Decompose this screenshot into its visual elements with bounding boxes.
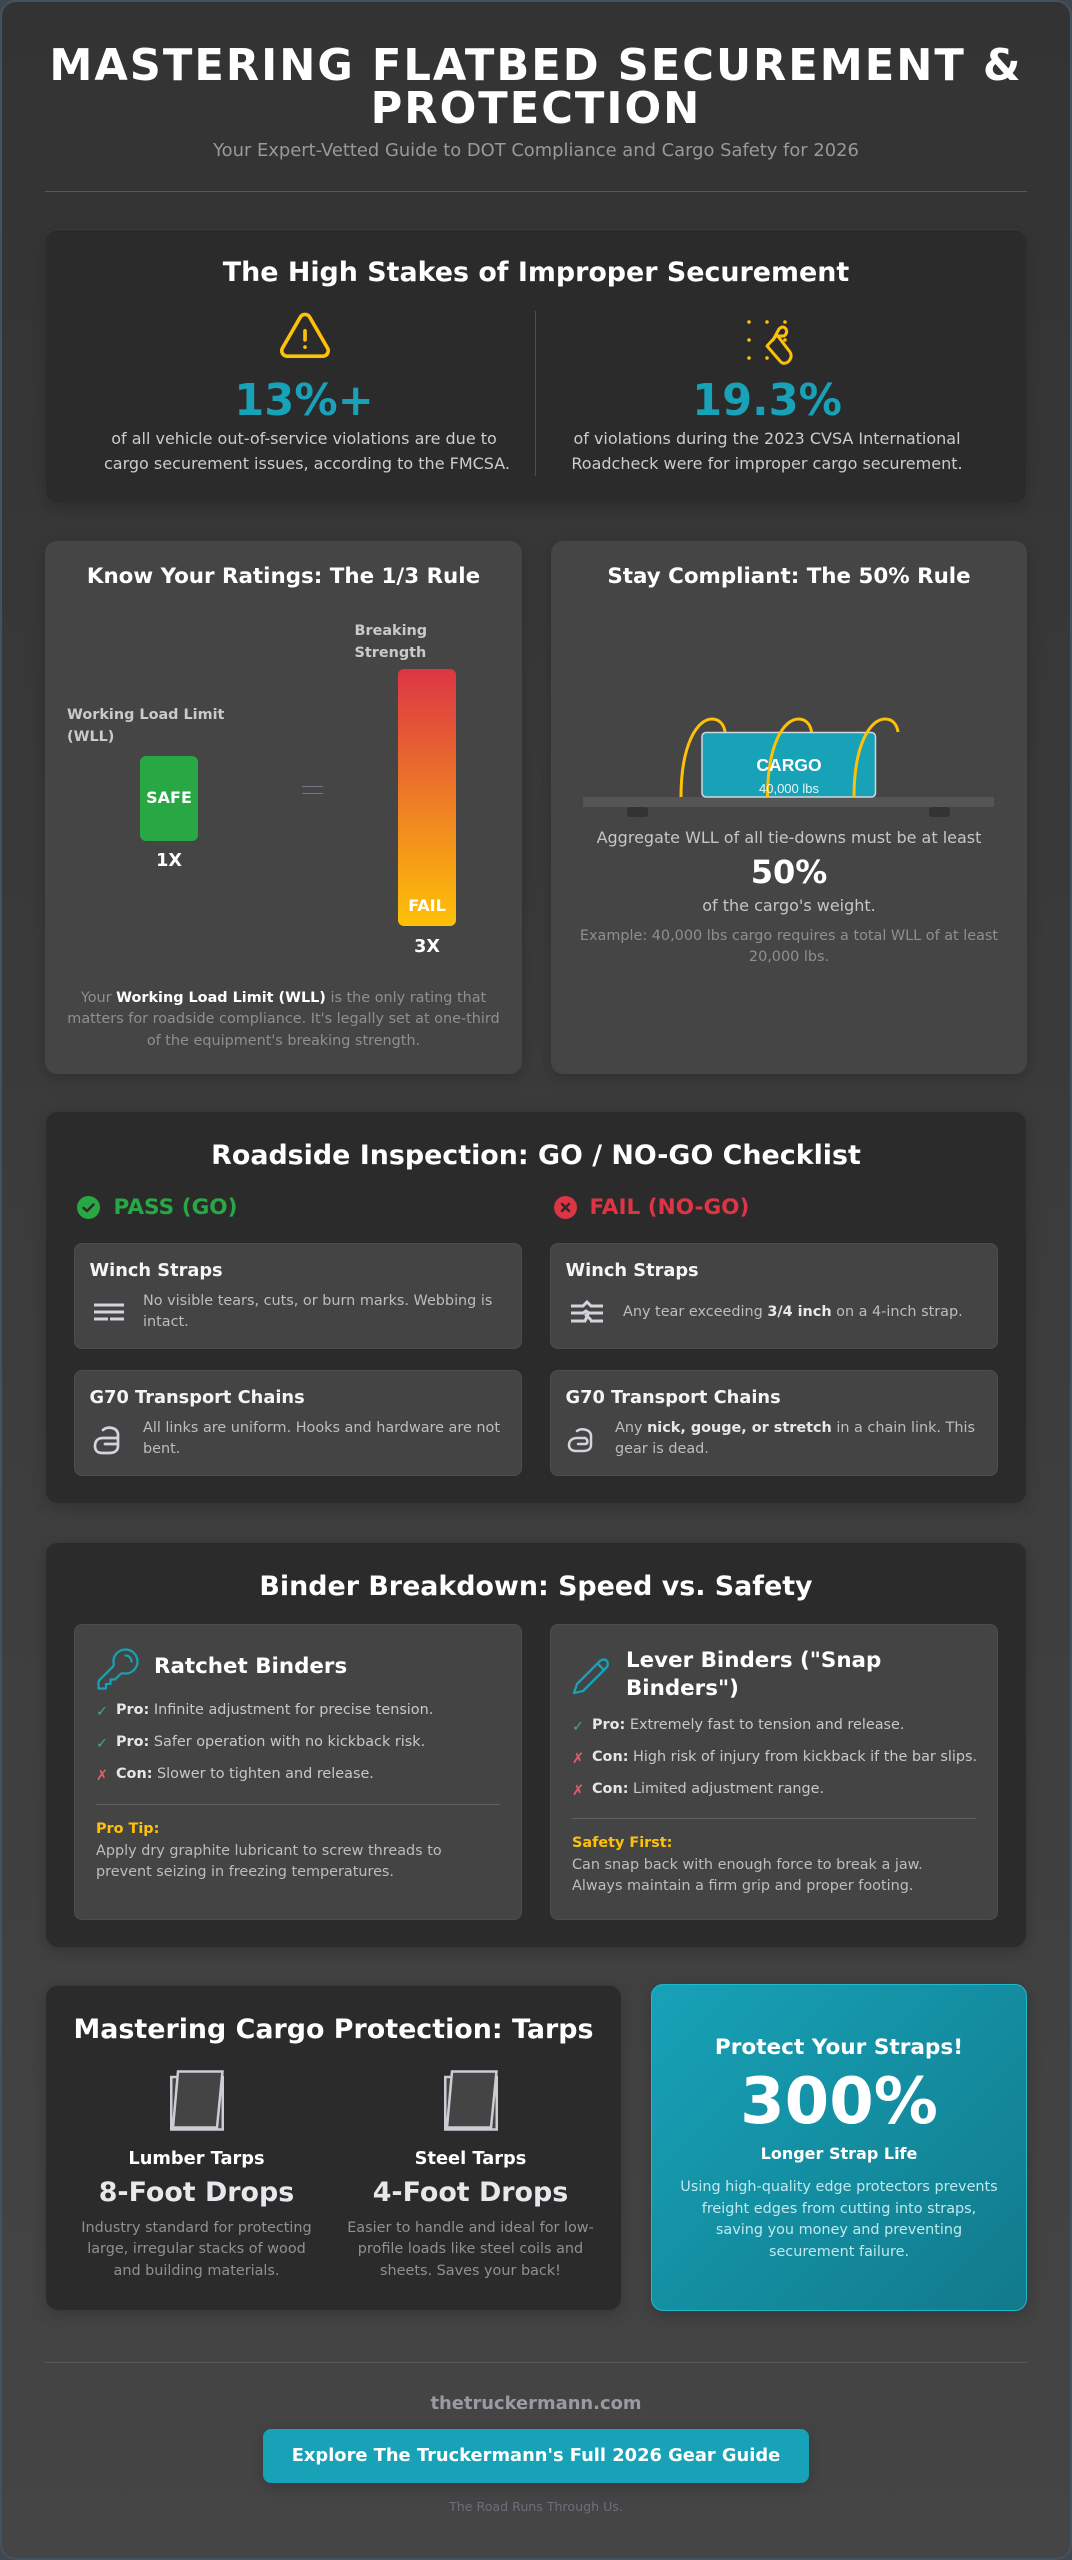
card text: gear is dead. [615, 1441, 709, 1457]
card text [143, 1292, 492, 1330]
icon: ratchet key [97, 1648, 139, 1690]
card title: Winch Straps [566, 1260, 699, 1281]
icon: broken strap [747, 320, 793, 365]
footer site name: thetruckermann.com [430, 2393, 642, 2414]
item: con: Con: Slower to tighten and release. [116, 1766, 374, 1782]
button: gear guide [263, 2429, 809, 2483]
tarp description: sheets. Saves your back! [380, 2263, 561, 2279]
stat description right: Roadcheck were for improper cargo securement. [571, 454, 963, 473]
button label: Explore The Truckermann's Full 2026 Gear Guide [292, 2445, 780, 2466]
card: pass chains [74, 1370, 522, 1476]
tarp drops: 8-Foot Drops [99, 2177, 294, 2208]
diagram: flatbed with cargo: 40,000 lbs [759, 781, 819, 796]
bar: fail [398, 669, 456, 926]
card text: Any tear exceeding 3/4 inch on a 4-inch strap. [623, 1304, 963, 1320]
tarp description [340, 2218, 601, 2282]
label: working load limit: (WLL) [67, 729, 114, 745]
tarp name: Lumber Tarps [128, 2148, 265, 2169]
diagram: flatbed with cargo [583, 718, 994, 817]
card text: intact. [143, 1314, 189, 1330]
card title: Winch Straps [90, 1260, 223, 1281]
label: working load limit [67, 707, 224, 745]
tarp description: large, irregular stacks of wood [87, 2241, 306, 2257]
callout text: securement failure. [769, 2244, 909, 2260]
subtitle: Your Expert-Vetted Guide to DOT Compliance and Cargo Safety for 2026 [213, 140, 859, 161]
title: MASTERING FLATBED SECUREMENT & [49, 41, 1023, 91]
pro tip: Pro Tip: [96, 1821, 159, 1837]
tarp drops: 4-Foot Drops [373, 2177, 568, 2208]
stat description left [104, 428, 510, 473]
stat: 13%: 13%+ [234, 376, 374, 426]
explanation text [67, 990, 500, 1049]
icon: tarp [170, 2070, 224, 2131]
item: con: Con: High risk of injury from kickback if the bar slips. [592, 1749, 977, 1765]
heading: tarps: Mastering Cargo Protection: Tarps [74, 2014, 593, 2045]
callout text [652, 2177, 1026, 2263]
pro tip [96, 1821, 442, 1880]
icon: fail [554, 1196, 577, 1219]
label: working load limit: Working Load Limit [67, 707, 224, 723]
card text: bent. [143, 1441, 180, 1457]
tarp description: and building materials. [114, 2263, 280, 2279]
stat description left: of all vehicle out-of-service violations are due to [111, 428, 497, 448]
bar: safe [140, 756, 198, 841]
panel: 50% rule [551, 541, 1027, 1074]
column: steel tarps [347, 2070, 594, 2279]
pro tip: Apply dry graphite lubricant to screw threads to [96, 1843, 442, 1859]
footer divider [45, 2362, 1027, 2363]
tarp description [81, 2220, 312, 2279]
card title: Ratchet Binders [154, 1654, 347, 1679]
safety first [572, 1835, 923, 1894]
card: fail chains [550, 1370, 998, 1476]
stat: 50%: 50% [751, 853, 827, 891]
icon: pass [77, 1196, 100, 1219]
tarp name: Steel Tarps [415, 2148, 526, 2169]
icon: torn strap [571, 1300, 603, 1322]
icon: warning triangle [280, 312, 330, 358]
label: breaking strength: Breaking [354, 623, 427, 639]
callout text: freight edges from cutting into straps, [702, 2200, 976, 2216]
stat divider [535, 311, 536, 476]
icon: intact strap [94, 1304, 124, 1320]
item: pro: Pro: Safer operation with no kickback risk. [116, 1734, 425, 1750]
card title: Binders") [626, 1676, 739, 1700]
stat: 19.3%: 19.3% [692, 376, 842, 426]
divider [96, 1804, 500, 1805]
card: pass winch straps [74, 1243, 522, 1349]
pros and cons list: ✓ [96, 1736, 108, 1752]
column: lumber tarps [81, 2070, 312, 2279]
card title: G70 Transport Chains [90, 1387, 305, 1408]
diagram: flatbed with cargo: CARGO [756, 755, 822, 775]
example: 20,000 lbs. [749, 949, 829, 965]
heading: binders: Binder Breakdown: Speed vs. Safety [259, 1571, 813, 1602]
panel: binder breakdown [46, 1542, 1026, 1947]
tarp description: profile loads like steel coils and [358, 2241, 583, 2257]
heading: checklist: Roadside Inspection: GO / NO-GO Checklist [211, 1140, 861, 1171]
fail header [554, 1195, 749, 1220]
explanation text: of the equipment's breaking strength. [147, 1033, 420, 1049]
item: pro: Pro: Extremely fast to tension and release. [592, 1717, 904, 1733]
safety first: Can snap back with enough force to break a jaw. [572, 1857, 923, 1873]
rule text: Aggregate WLL of all tie-downs must be at least [597, 828, 981, 847]
card text: Any nick, gouge, or stretch in a chain link. This [615, 1420, 975, 1436]
label: fail: FAIL [408, 896, 446, 915]
heading: 50% rule: Stay Compliant: The 50% Rule [607, 564, 971, 589]
label: breaking strength [354, 623, 427, 661]
pros and cons list [96, 1702, 433, 1784]
item: pro: Pro: Infinite adjustment for precise tension. [116, 1702, 433, 1718]
panel: high stakes [46, 229, 1026, 503]
icon: intact chain [94, 1426, 120, 1454]
safety first: Always maintain a firm grip and proper footing. [572, 1878, 913, 1894]
pros and cons list [572, 1717, 977, 1799]
pros and cons list: ✗ [572, 1751, 584, 1767]
card text: All links are uniform. Hooks and hardware are not [143, 1420, 500, 1436]
panel: roadside inspection [46, 1111, 1026, 1503]
item: con: Con: Limited adjustment range. [592, 1781, 824, 1797]
example [580, 928, 998, 965]
pros and cons list: ✗ [96, 1768, 108, 1784]
panel: tarps [46, 1985, 621, 2310]
explanation text: matters for roadside compliance. It's legally set at one-third [67, 1011, 500, 1027]
stat description right: of violations during the 2023 CVSA International [573, 428, 961, 448]
icon: tarp [444, 2070, 498, 2131]
label: breaking strength: Strength [354, 645, 426, 661]
divider [572, 1818, 976, 1819]
card: fail winch straps [550, 1243, 998, 1349]
label: 3X: 3X [414, 937, 440, 957]
stat description right [571, 428, 963, 473]
heading: high stakes: The High Stakes of Improper Securement [223, 257, 849, 288]
card: lever binders [550, 1624, 998, 1920]
card text: No visible tears, cuts, or burn marks. Webbing is [143, 1292, 492, 1308]
card title: G70 Transport Chains [566, 1387, 781, 1408]
example: Example: 40,000 lbs cargo requires a total WLL of at least [580, 928, 998, 944]
tarp description: Industry standard for protecting [81, 2220, 312, 2236]
callout text: Using high-quality edge protectors prevents [680, 2179, 998, 2195]
header divider [45, 191, 1027, 192]
stat: 300%: 300% [740, 2065, 938, 2139]
callout heading: Protect Your Straps! [715, 2035, 963, 2060]
label: pass: PASS (GO) [114, 1195, 238, 1220]
heading: 1/3 rule: Know Your Ratings: The 1/3 Rule [87, 564, 480, 589]
callout subheading: Longer Strap Life [761, 2144, 917, 2163]
pros and cons list: ✓ [96, 1704, 108, 1720]
icon: damaged chain [568, 1428, 592, 1452]
icon: lever [572, 1658, 609, 1694]
equals sign [302, 786, 323, 794]
card: ratchet binders [74, 1624, 522, 1920]
pros and cons list: ✓ [572, 1719, 584, 1735]
safety first: Safety First: [572, 1835, 672, 1851]
card text [615, 1420, 975, 1457]
label: fail: FAIL (NO-GO) [590, 1195, 749, 1220]
callout text: saving you money and preventing [716, 2222, 962, 2238]
footer tagline: The Road Runs Through Us. [449, 2499, 623, 2514]
label: safe: SAFE [146, 788, 192, 807]
callout: protect your straps [651, 1984, 1027, 2311]
stat description left: cargo securement issues, according to the FMCSA. [104, 454, 510, 473]
card text [143, 1420, 500, 1457]
title: PROTECTION [371, 84, 701, 134]
explanation text: Your Working Load Limit (WLL) is the only rating that [81, 990, 486, 1006]
tarp description: Easier to handle and ideal for low- [347, 2220, 594, 2236]
label: 1X: 1X [156, 851, 182, 871]
pass header [77, 1195, 238, 1220]
panel: 1/3 rule [45, 541, 522, 1074]
rule text continued: of the cargo's weight. [702, 896, 876, 915]
title [49, 41, 1023, 134]
pro tip: prevent seizing in freezing temperatures. [96, 1864, 394, 1880]
card title: Lever Binders ("Snap [626, 1648, 881, 1672]
pros and cons list: ✗ [572, 1783, 584, 1799]
card title [626, 1648, 881, 1700]
